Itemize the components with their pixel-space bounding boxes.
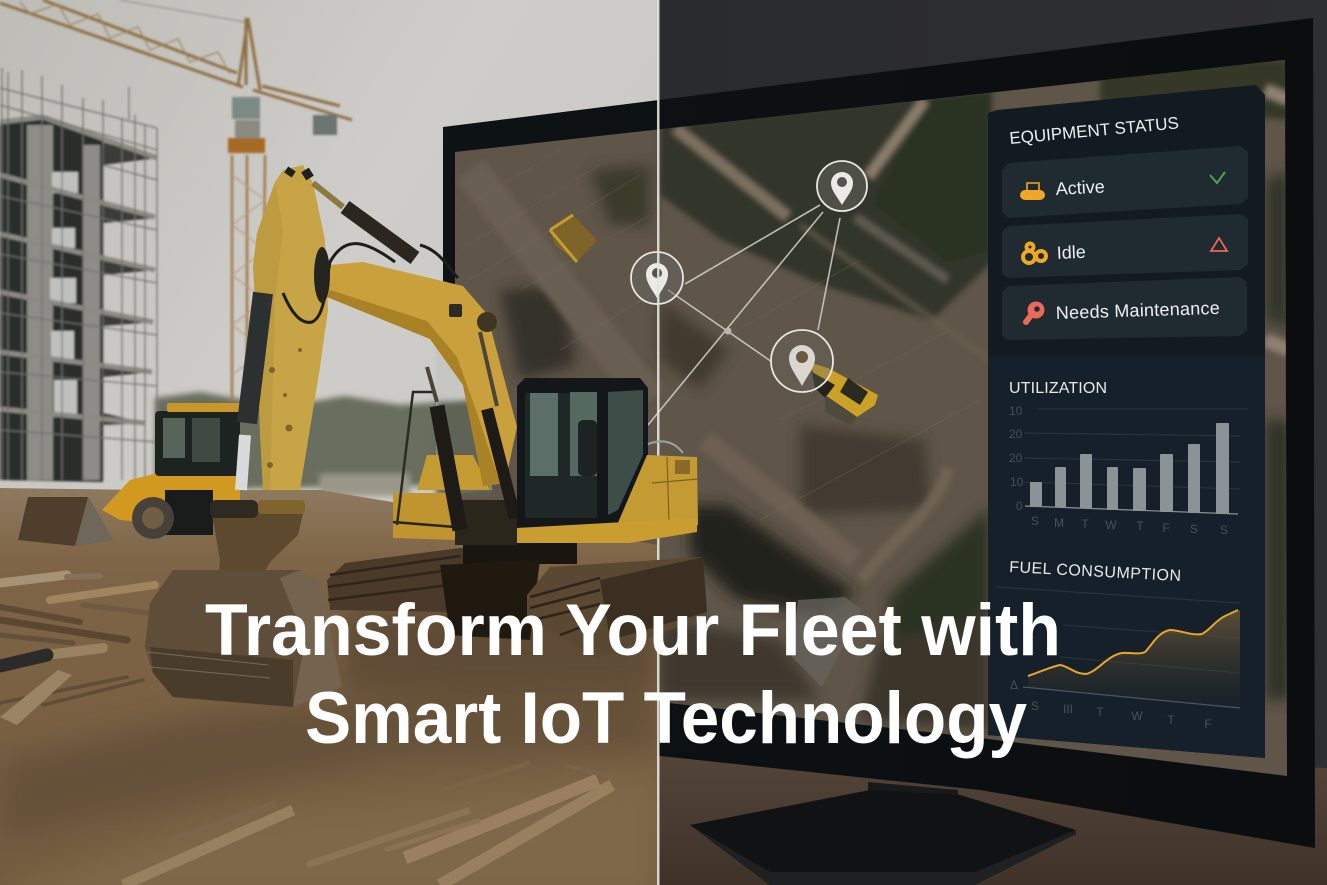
excavator stick cylinder: [313, 183, 343, 207]
excavator cab: [517, 378, 648, 528]
center divider line: [657, 0, 660, 885]
construction crane: [0, 0, 352, 400]
background: desk: [658, 752, 1327, 885]
building window openings: [50, 172, 78, 417]
utilization x-axis labels: S: [1190, 522, 1198, 536]
excavator boom cylinders: [437, 406, 460, 530]
excavator stick top pin: [288, 169, 310, 178]
location pin lower: [771, 330, 833, 392]
wheel loader: [18, 403, 240, 546]
monitor stand: [690, 782, 1076, 885]
title: Transform Your Fleet with: [205, 590, 1061, 671]
network connection lines: [648, 205, 840, 425]
utilization y-axis labels: 10: [1009, 404, 1023, 418]
panel: equipment status: [1002, 113, 1248, 340]
aerial concrete slab: [792, 597, 862, 687]
monitor bezel: [443, 18, 1315, 848]
loader wheel: [132, 497, 174, 539]
construction ground: [0, 488, 658, 885]
flat plank: [0, 670, 72, 725]
excavator railing: [397, 392, 433, 525]
icon: warning triangle: [1211, 238, 1227, 251]
fuel axis labels: Δ: [1010, 678, 1018, 692]
building columns: [27, 125, 100, 480]
floor slabs: [0, 117, 157, 423]
status row: needs maintenance: Needs Maintenance: [1055, 298, 1220, 323]
aerial small yellow machine: [550, 215, 597, 262]
title: Smart IoT Technology: [305, 678, 1027, 759]
fuel axis labels: [1010, 678, 1212, 731]
heading: equipment status: EQUIPMENT STATUS: [1009, 113, 1180, 148]
ground shading: [0, 590, 658, 885]
wood plank pile left: [0, 575, 155, 705]
excavator tracks: [327, 540, 707, 658]
dashboard panel: [988, 85, 1265, 758]
excavator body strip: [517, 518, 697, 543]
utilization x-axis labels: W: [1105, 518, 1117, 532]
location pin left: [631, 252, 683, 304]
aerial terrain: [660, 60, 1290, 320]
wood planks foreground: [123, 763, 636, 885]
status row: idle: Idle: [1056, 242, 1086, 263]
loader body: [102, 470, 240, 525]
scaffolding: [0, 68, 157, 480]
loader cab: [155, 411, 240, 476]
fuel axis labels: W: [1131, 709, 1143, 723]
excavator bucket linkage: [210, 503, 305, 585]
network hub dot: [724, 328, 732, 334]
under-slab shadows: [103, 142, 157, 425]
excavator stick: [253, 165, 328, 490]
utilization y-axis labels: 10: [1010, 475, 1024, 489]
icon: maintenance wrench: [1026, 302, 1044, 322]
status row: active: [1002, 146, 1248, 218]
loader bucket: [18, 497, 113, 546]
fuel area fill: [1028, 610, 1240, 708]
fuel axis labels: F: [1204, 717, 1212, 731]
panel: utilization: [1009, 380, 1248, 537]
utilization x-axis labels: T: [1136, 519, 1144, 533]
status row: needs maintenance: [1002, 277, 1247, 340]
utilization y-axis labels: [1009, 404, 1024, 513]
utilization x-axis labels: S: [1031, 514, 1039, 528]
excavator bucket: [145, 570, 342, 707]
fuel line: [1028, 610, 1238, 676]
background: sky: [0, 0, 658, 520]
sky visible under excavator boom: [436, 325, 492, 495]
background: dark wall: [658, 0, 1327, 780]
icon: green check: [1210, 172, 1225, 183]
excavator boom: [327, 262, 517, 486]
excavator rear body: [417, 455, 490, 490]
unfinished building with scaffolding: [0, 68, 157, 482]
utilization x-axis labels: T: [1081, 517, 1089, 531]
aerial dirt tracks: [470, 90, 1290, 580]
status row: idle: [1002, 214, 1248, 278]
status row: active: Active: [1055, 176, 1105, 199]
icon: active machine: [1020, 183, 1045, 200]
panel: fuel consumption: [997, 559, 1240, 731]
title: [205, 590, 1061, 759]
icon: idle wheels: [1023, 244, 1046, 263]
excavator: [145, 165, 707, 707]
location pin top: [817, 161, 867, 211]
background trees: [155, 392, 460, 496]
utilization x-axis labels: [1031, 514, 1228, 537]
fuel axis labels: T: [1167, 713, 1175, 727]
utilization y-axis labels: 20: [1009, 451, 1023, 465]
utilization y-axis labels: 0: [1016, 499, 1023, 513]
utilization x-axis labels: F: [1162, 521, 1170, 535]
fuel axis labels: T: [1096, 705, 1104, 719]
utilization x-axis labels: S: [1220, 523, 1228, 537]
building dark core: [0, 117, 103, 482]
fuel axis labels: III: [1063, 702, 1073, 716]
utilization bar chart: [1030, 423, 1229, 514]
monitor screen: aerial site map: [440, 40, 1300, 800]
excavator hoses: [283, 244, 458, 322]
fuel axis labels: S: [1031, 699, 1039, 713]
excavator engine cover: [617, 455, 698, 525]
aerial excavator: [808, 362, 878, 425]
utilization x-axis labels: M: [1054, 516, 1064, 530]
heading: utilization: UTILIZATION: [1009, 380, 1107, 397]
utilization y-axis labels: 20: [1009, 427, 1023, 441]
heading: fuel consumption: FUEL CONSUMPTION: [1009, 559, 1181, 585]
